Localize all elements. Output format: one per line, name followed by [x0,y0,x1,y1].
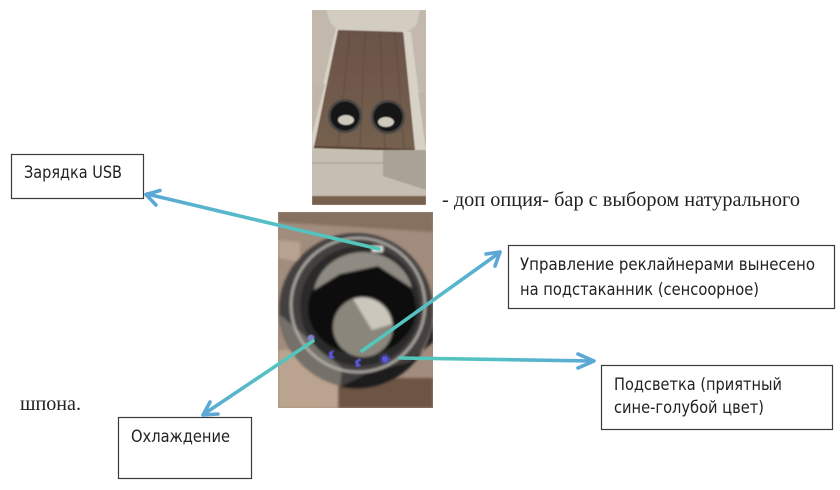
callout: USB charging: Зарядка USB [24,163,122,182]
photo: cup holder with touch controls [278,212,433,408]
callout: cooling [118,418,252,478]
callout: recliner control: на подстаканник (сенсоорное) [520,280,759,299]
callout: cooling: Охлаждение [131,427,230,446]
callout: backlight: Подсветка (приятный [614,375,782,394]
callout: backlight: сине-голубой цвет) [614,398,764,417]
text: veneer option line 1: - доп опция- бар с выбором натурального [442,189,800,211]
callout: recliner control [508,246,834,308]
arrow: to recliner control [362,252,500,351]
callout: recliner control: Управление реклайнерами вынесено [520,255,815,274]
photo: console bar with natural veneer [312,10,426,205]
icon: cup holders [328,99,405,134]
arrow: to backlight [400,354,594,368]
arrow: to cooling [203,341,313,415]
text: veneer option line 2: шпона. [20,393,81,415]
callout: backlight [602,366,832,430]
callout: USB charging [12,154,144,198]
icon: blue touch buttons [308,334,390,367]
arrow: to USB charging [146,190,379,249]
